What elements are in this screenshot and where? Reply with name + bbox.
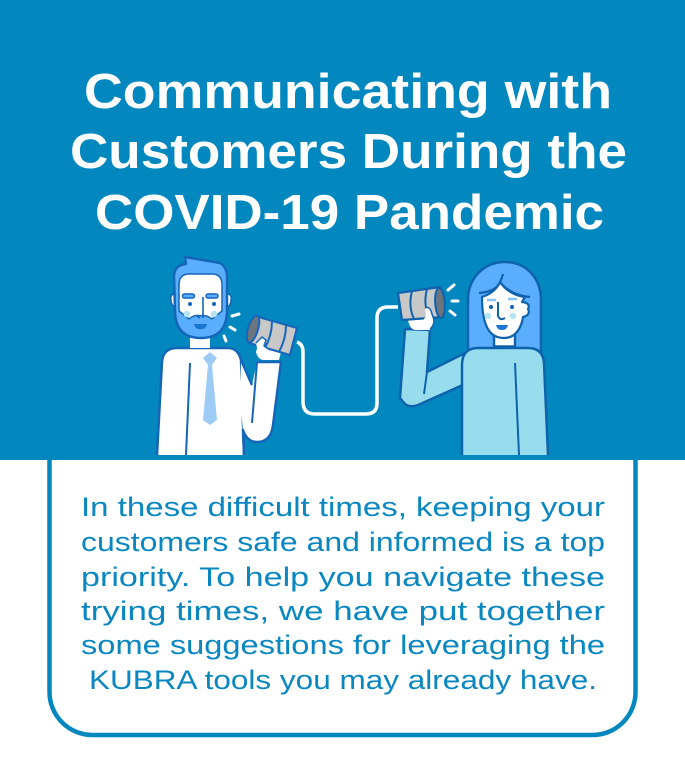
intro text: In these difficult times, keeping your (81, 492, 605, 522)
man: eyebrows (182, 294, 218, 298)
title: COVID-19 Pandemic (95, 186, 604, 240)
illustration: man with can (157, 257, 297, 455)
title (70, 65, 627, 240)
woman: mouth (496, 325, 508, 330)
man: can (249, 316, 297, 355)
woman: arm (400, 329, 465, 406)
woman: hand behind can (408, 314, 434, 330)
header panel (0, 0, 685, 460)
woman: can (398, 287, 443, 320)
man: hand behind can (256, 345, 281, 360)
woman: nose (498, 302, 505, 319)
man: tie (203, 352, 217, 425)
woman: face (482, 282, 529, 338)
man: ears (171, 294, 231, 308)
man: face (179, 274, 222, 319)
woman: thumb (420, 307, 434, 329)
panel: intro box (50, 460, 636, 735)
title: Customers During the (70, 125, 627, 179)
woman: eyes (489, 305, 514, 309)
woman: torso (462, 348, 548, 455)
man: cheeks (184, 311, 217, 317)
woman: cheeks (485, 313, 516, 319)
woman: neck (494, 335, 515, 347)
man: mouth (194, 324, 207, 330)
title: Communicating with (84, 65, 612, 119)
man: neck (190, 334, 210, 348)
woman: hair (468, 262, 541, 352)
string between the cans (297, 307, 398, 414)
man: thumb (256, 337, 270, 356)
woman: sound marks (448, 285, 458, 315)
intro text: some suggestions for leveraging the (81, 630, 605, 660)
man: nose (197, 297, 203, 318)
man: sound marks (224, 314, 239, 341)
intro text (81, 492, 605, 695)
intro text: customers safe and informed is a top (81, 527, 605, 557)
man: arm (240, 361, 281, 442)
intro text: trying times, we have put together (81, 596, 605, 626)
man: hair and beard (174, 257, 227, 338)
intro text: priority. To help you navigate these (81, 562, 605, 592)
man: eyes (188, 302, 216, 306)
intro text: KUBRA tools you may already have. (89, 665, 597, 695)
man: torso (157, 348, 244, 455)
woman: fringe strokes (479, 274, 530, 297)
woman: eyebrows (487, 299, 517, 300)
illustration: woman with can (398, 262, 548, 455)
